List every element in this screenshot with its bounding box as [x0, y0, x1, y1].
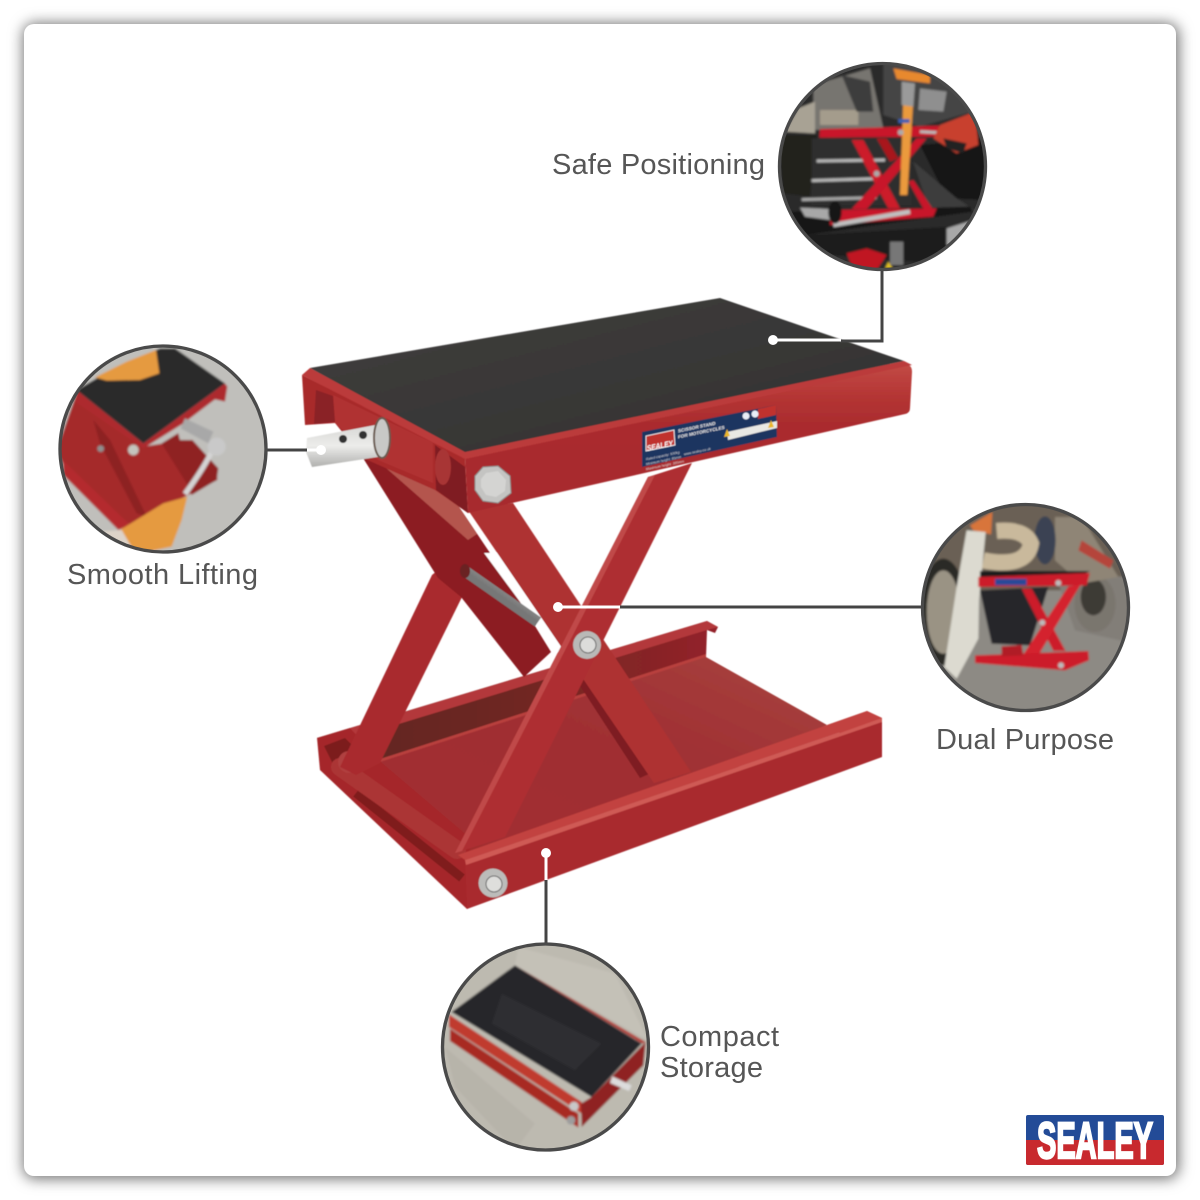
product label: Minimum height: 85mm — [646, 455, 681, 466]
product: motorcycle scissor stand — [302, 298, 912, 909]
rear scissor leg from top left — [363, 458, 662, 778]
front scissor leg, upper left to lower right — [468, 503, 691, 783]
centre pivot bolt — [573, 631, 601, 659]
product label: SEALEY — [647, 439, 673, 453]
product label: FOR MOTORCYCLES — [678, 425, 725, 440]
product label: Rated capacity: 500kg — [646, 450, 680, 461]
product label: SCISSOR STAND — [678, 421, 716, 434]
label: Compact Storage: Compact — [660, 1021, 779, 1053]
product label: Maximum height: 385mm — [646, 459, 684, 471]
photo circle: dual purpose — [920, 502, 1130, 712]
label: Compact Storage: Storage — [660, 1052, 763, 1084]
top front hex bolt — [475, 466, 511, 503]
photo circle: smooth lifting — [58, 344, 268, 554]
label: Compact Storage — [660, 1021, 779, 1084]
callout: compact storage — [541, 848, 551, 945]
base left end channel — [317, 728, 470, 909]
top frame front face — [465, 365, 912, 513]
label: Safe Positioning: Safe Positioning — [552, 149, 765, 181]
steel rod — [460, 564, 538, 622]
top frame rim — [302, 361, 912, 459]
callout: smooth lifting — [266, 445, 326, 455]
product label: www.sealey.co.uk — [684, 447, 711, 456]
lifting screw shaft — [306, 418, 390, 467]
photo circle: safe positioning — [778, 62, 988, 272]
circle border — [922, 504, 1128, 710]
circle border — [442, 944, 648, 1150]
circle border — [779, 63, 985, 269]
label: Smooth Lifting: Smooth Lifting — [67, 559, 258, 591]
photo circle: compact storage — [440, 942, 650, 1152]
callout: safe positioning — [768, 268, 882, 345]
callout: dual purpose — [553, 602, 923, 612]
base pivot bolt — [478, 868, 508, 898]
base front rail — [458, 711, 882, 909]
rubber top pad — [310, 298, 904, 452]
rear scissor leg rising from base — [340, 570, 462, 775]
label: Dual Purpose: Dual Purpose — [936, 724, 1114, 756]
base floor — [380, 657, 827, 865]
front scissor leg, upper right to lower left — [455, 463, 692, 853]
white gap between legs — [484, 553, 563, 652]
base rear wall — [317, 621, 718, 764]
callout lines and dots — [266, 268, 923, 945]
circle border — [60, 346, 266, 552]
product label — [642, 405, 777, 471]
top frame side opening — [302, 375, 468, 513]
